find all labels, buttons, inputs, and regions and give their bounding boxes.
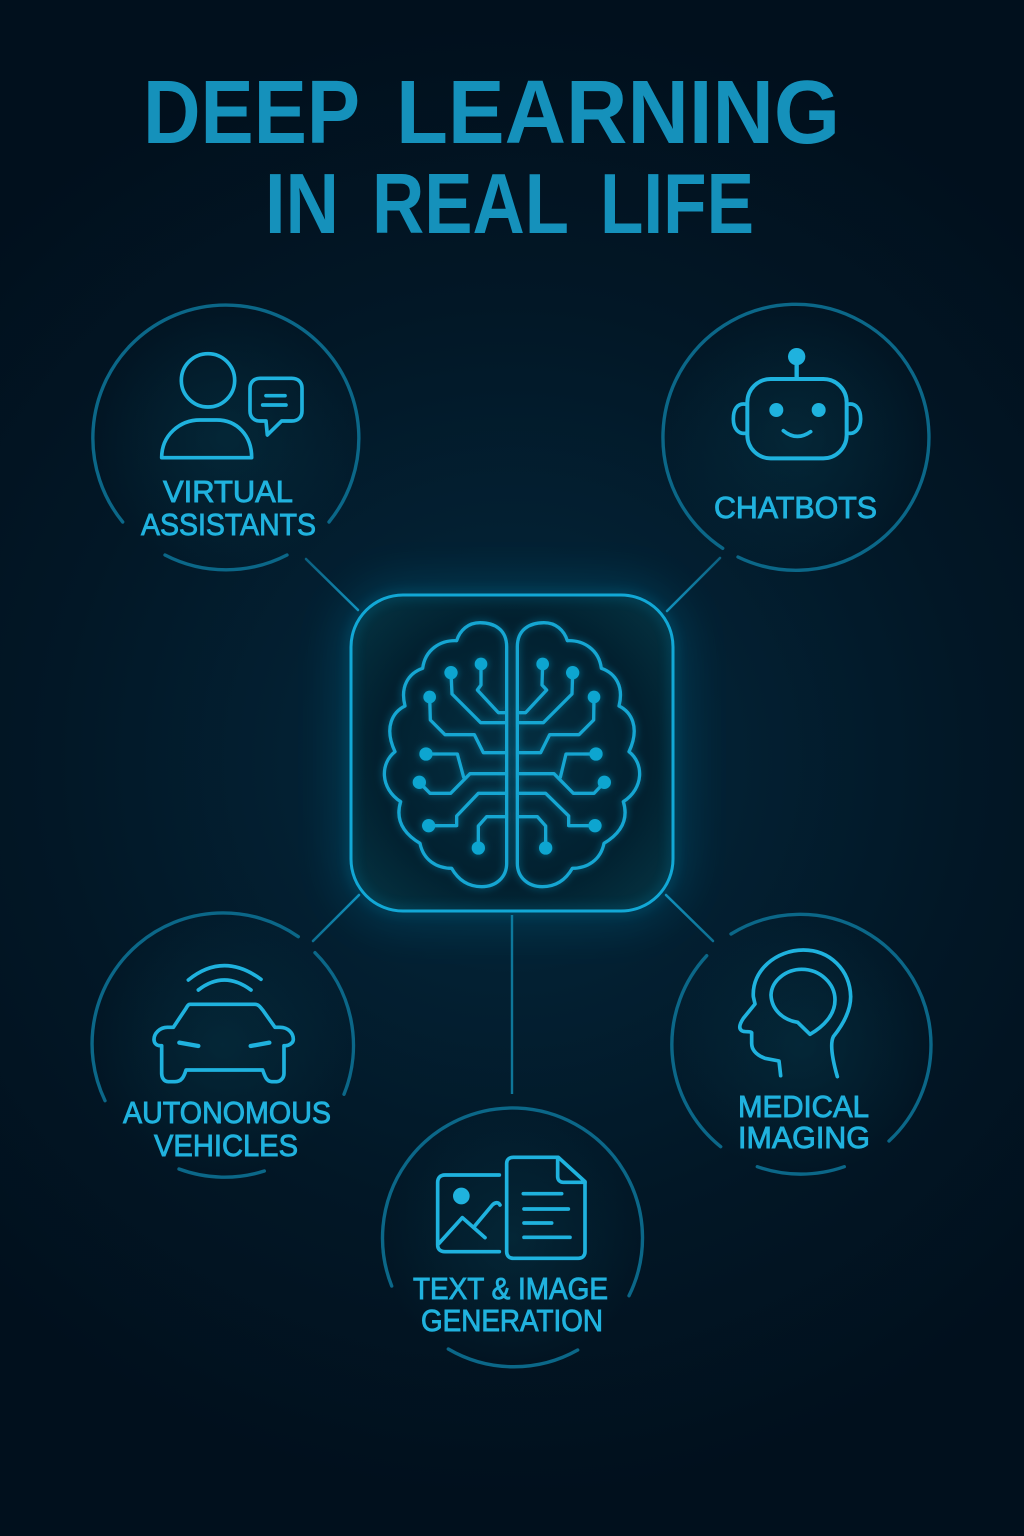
icon: picture and document xyxy=(438,1157,585,1258)
panel: medical imaging xyxy=(672,914,932,1175)
title: DEEP xyxy=(143,63,360,163)
title: IN xyxy=(265,157,339,252)
label: autonomous vehicles xyxy=(123,1095,331,1163)
ring: medical imaging xyxy=(672,914,931,1174)
label: autonomous vehicles: VEHICLES xyxy=(154,1128,298,1163)
connector lines xyxy=(306,558,720,1094)
ring: text and image generation xyxy=(383,1108,643,1367)
ring: chatbots xyxy=(663,304,929,570)
label: text and image generation: TEXT & IMAGE xyxy=(413,1271,608,1306)
ring: autonomous vehicles xyxy=(92,913,353,1177)
icon: circuit brain xyxy=(384,623,640,887)
title xyxy=(143,63,840,252)
title: LEARNING xyxy=(396,63,840,163)
label: autonomous vehicles: AUTONOMOUS xyxy=(123,1095,331,1130)
panel: chatbots xyxy=(663,304,929,571)
panel: text and image generation xyxy=(382,1108,643,1368)
icon: car with signal xyxy=(154,966,293,1082)
label: text and image generation: GENERATION xyxy=(421,1303,603,1338)
title: LIFE xyxy=(600,157,754,252)
title: REAL xyxy=(372,157,569,252)
panel: central brain xyxy=(351,595,673,911)
panel: autonomous vehicles xyxy=(92,913,354,1177)
label: text and image generation xyxy=(413,1271,608,1338)
label: virtual assistants: ASSISTANTS xyxy=(141,507,316,542)
icon: head with brain xyxy=(740,950,851,1077)
icon: robot head xyxy=(733,348,861,458)
label: virtual assistants: VIRTUAL xyxy=(163,474,293,509)
ring: virtual assistants xyxy=(93,305,359,570)
label: virtual assistants xyxy=(141,474,316,542)
icon: person with speech bubble xyxy=(162,354,302,458)
label: medical imaging: MEDICAL xyxy=(738,1089,869,1124)
label: medical imaging: IMAGING xyxy=(738,1120,870,1155)
label: chatbots: CHATBOTS xyxy=(714,490,877,525)
label: medical imaging xyxy=(738,1089,870,1155)
panel: virtual assistants xyxy=(93,305,359,571)
